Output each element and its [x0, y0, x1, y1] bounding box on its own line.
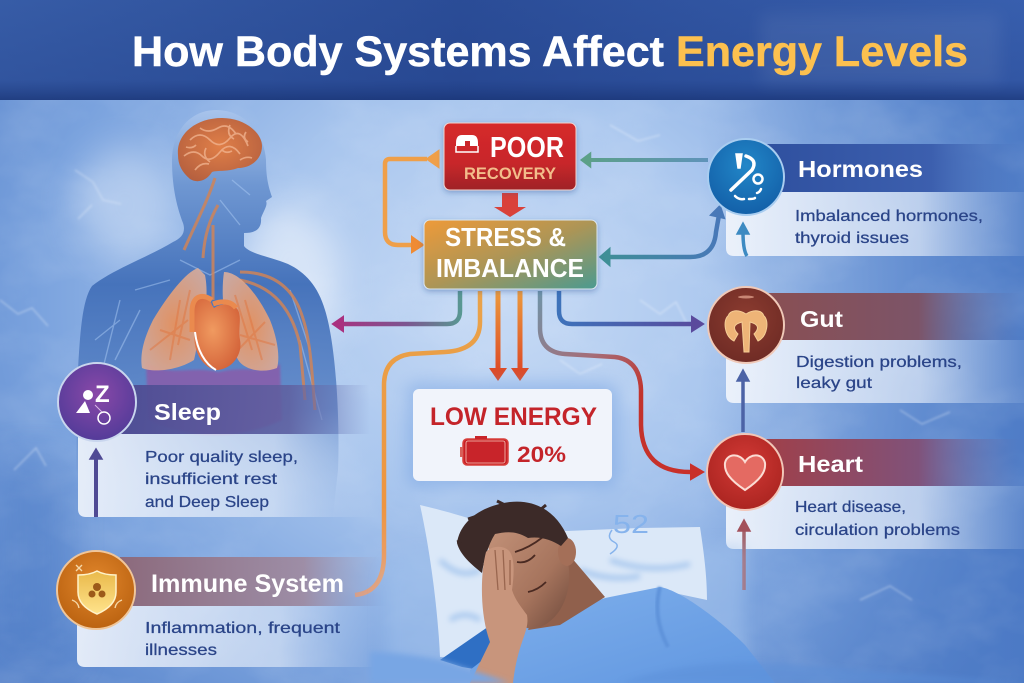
heart: [190, 298, 240, 370]
icon: sleep: Z: [95, 381, 110, 408]
imbalance label: IMBALANCE: [436, 253, 584, 283]
hormones header band: [760, 144, 1024, 192]
52 squiggle: 52: [613, 509, 649, 539]
low energy label: LOW ENERGY: [430, 403, 597, 431]
heart description: circulation problems: [795, 522, 960, 539]
arrow: poor recovery to stress: [494, 193, 526, 217]
gut description: [796, 354, 962, 392]
sleep description: [145, 449, 298, 511]
arrow: stress to immune: [355, 291, 480, 595]
arrow: stress to heart: [540, 291, 703, 479]
gut body panel: [726, 340, 1024, 403]
panel: hormones: [708, 139, 1024, 256]
icon: heart: [707, 434, 783, 510]
arrow: hormones to poor recovery: [582, 154, 708, 166]
blanket front: [370, 652, 510, 683]
sleep description: and Deep Sleep: [145, 494, 269, 511]
sleep title: Sleep: [154, 399, 221, 425]
brain: [178, 118, 262, 181]
arrow: stress to low energy right: [511, 291, 529, 381]
immune description: [145, 620, 341, 659]
sleep body panel: [78, 434, 380, 517]
immune header band: [120, 557, 382, 606]
gut description: Digestion problems,: [796, 354, 962, 371]
sleep description: insufficient rest: [145, 471, 278, 488]
hand and arm: [470, 547, 527, 683]
connector arrows: [333, 152, 724, 595]
battery percent: 20%: [517, 442, 566, 467]
shirt: [470, 587, 775, 683]
face: [487, 524, 569, 629]
lungs: [141, 268, 207, 370]
hormones body panel: [726, 192, 1024, 256]
header band: [0, 0, 1024, 100]
panel: gut: [708, 287, 1024, 432]
box: poor recovery: [444, 123, 576, 190]
ear: [558, 538, 576, 566]
arrow: stress to low energy left: [489, 291, 507, 381]
hormones description: Imbalanced hormones,: [795, 208, 983, 225]
heart header band: [760, 439, 1024, 486]
recovery label: RECOVERY: [464, 165, 556, 183]
panel: immune system: [57, 551, 390, 667]
poor label: POOR: [490, 132, 564, 164]
title: How Body Systems Affect Energy Levels: [132, 28, 968, 76]
sleep header band: [100, 385, 370, 434]
closed eye and mouth: [515, 537, 546, 592]
neck: [528, 550, 605, 630]
abdomen: [146, 362, 282, 435]
collar blue: [440, 622, 508, 670]
callout: low energy: [407, 383, 618, 487]
sleep up arrow: [90, 449, 102, 517]
stress label: STRESS &: [445, 222, 566, 252]
body silhouette: [76, 110, 338, 525]
hormones description: [795, 208, 983, 247]
immune body panel: [77, 606, 390, 667]
gut description: leaky gut: [796, 375, 873, 392]
hormones description: thyroid issues: [795, 230, 909, 247]
heart title: Heart: [798, 451, 863, 477]
heart up arrow: [738, 520, 750, 590]
icon: battery: [460, 436, 508, 465]
hormones up arrow: [737, 223, 749, 256]
icon: hormones: [708, 139, 784, 215]
illustration: tired man in bed: [370, 501, 1024, 683]
arrow: stress to body: [333, 291, 460, 331]
icon: shield: [57, 551, 135, 629]
hormones title: Hormones: [798, 156, 923, 182]
gut title: Gut: [800, 306, 843, 332]
hair: [457, 502, 568, 573]
icon: poor recovery: [456, 135, 478, 152]
heart description: Heart disease,: [795, 499, 906, 516]
box: stress and imbalance: [424, 220, 597, 289]
immune description: Inflammation, frequent: [145, 620, 341, 637]
immune title: Immune System: [151, 570, 344, 598]
icon: sleep: [58, 363, 136, 441]
gut header band: [760, 293, 1024, 340]
arrow: orange loop: [385, 152, 438, 252]
nerves orange: [184, 178, 315, 410]
panel: heart: [707, 434, 1024, 590]
bedding back: [385, 545, 745, 670]
arrow: stress to gut: [559, 291, 703, 331]
anatomical human figure: [75, 110, 340, 525]
arrow: stress to hormones: [601, 206, 724, 264]
panel: sleep: [58, 363, 380, 517]
pillow: [420, 505, 707, 660]
immune description: illnesses: [145, 642, 217, 659]
icon: gut: [708, 287, 784, 363]
sleep description: Poor quality sleep,: [145, 449, 298, 466]
heart description: [795, 499, 960, 539]
gut up arrow: [737, 370, 749, 432]
heart body panel: [726, 486, 1024, 549]
